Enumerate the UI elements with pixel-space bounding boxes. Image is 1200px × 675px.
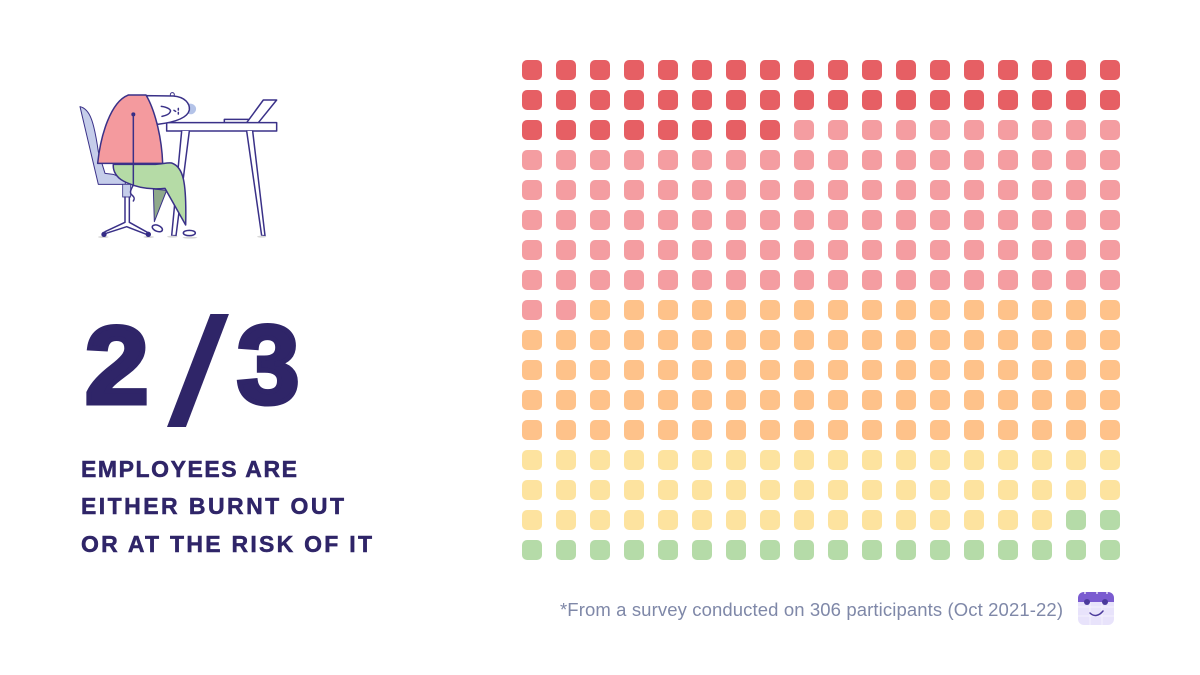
office chair: [80, 107, 154, 238]
description text: EITHER BURNT OUT: [81, 493, 344, 519]
icon: smiling calendar logo: [1078, 590, 1114, 625]
row 5: high risk: [522, 180, 1120, 200]
head resting on desk: [145, 93, 196, 124]
desk and laptop: [167, 100, 277, 238]
illustration: exhausted employee slumped at desk: [80, 93, 277, 239]
headline statistic: 2/3: 2: [85, 303, 149, 427]
torso in red: [98, 95, 163, 163]
row 3: burnt out and high risk: [522, 120, 1120, 140]
row 8: high risk: [522, 270, 1120, 290]
row 7: high risk: [522, 240, 1120, 260]
waffle chart: 306 survey participants: [522, 60, 1120, 560]
row 16: low risk and healthy: [522, 510, 1120, 530]
row 12: medium risk: [522, 390, 1120, 410]
description text: OR AT THE RISK OF IT: [81, 531, 372, 557]
description text: EMPLOYEES ARE: [81, 456, 297, 482]
row 10: medium risk: [522, 330, 1120, 350]
green trousers: [113, 163, 186, 225]
arm line: [130, 112, 135, 201]
row 9: high and medium risk: [522, 300, 1120, 320]
headline statistic: 2/3: /: [160, 288, 235, 457]
row 14: low risk: [522, 450, 1120, 470]
shoes: [151, 224, 197, 239]
row 2: burnt out: [522, 90, 1120, 110]
description text: [81, 456, 372, 557]
row 6: high risk: [522, 210, 1120, 230]
row 13: medium risk: [522, 420, 1120, 440]
row 17: healthy: [522, 540, 1120, 560]
headline statistic: 2/3: 3: [237, 303, 299, 427]
survey footnote: *From a survey conducted on 306 participants (Oct 2021-22): [560, 599, 1063, 620]
far leg: [153, 189, 167, 222]
headline statistic: 2/3: [85, 288, 299, 457]
row 4: high risk: [522, 150, 1120, 170]
row 11: medium risk: [522, 360, 1120, 380]
row 15: low risk: [522, 480, 1120, 500]
row 1: burnt out: [522, 60, 1120, 80]
